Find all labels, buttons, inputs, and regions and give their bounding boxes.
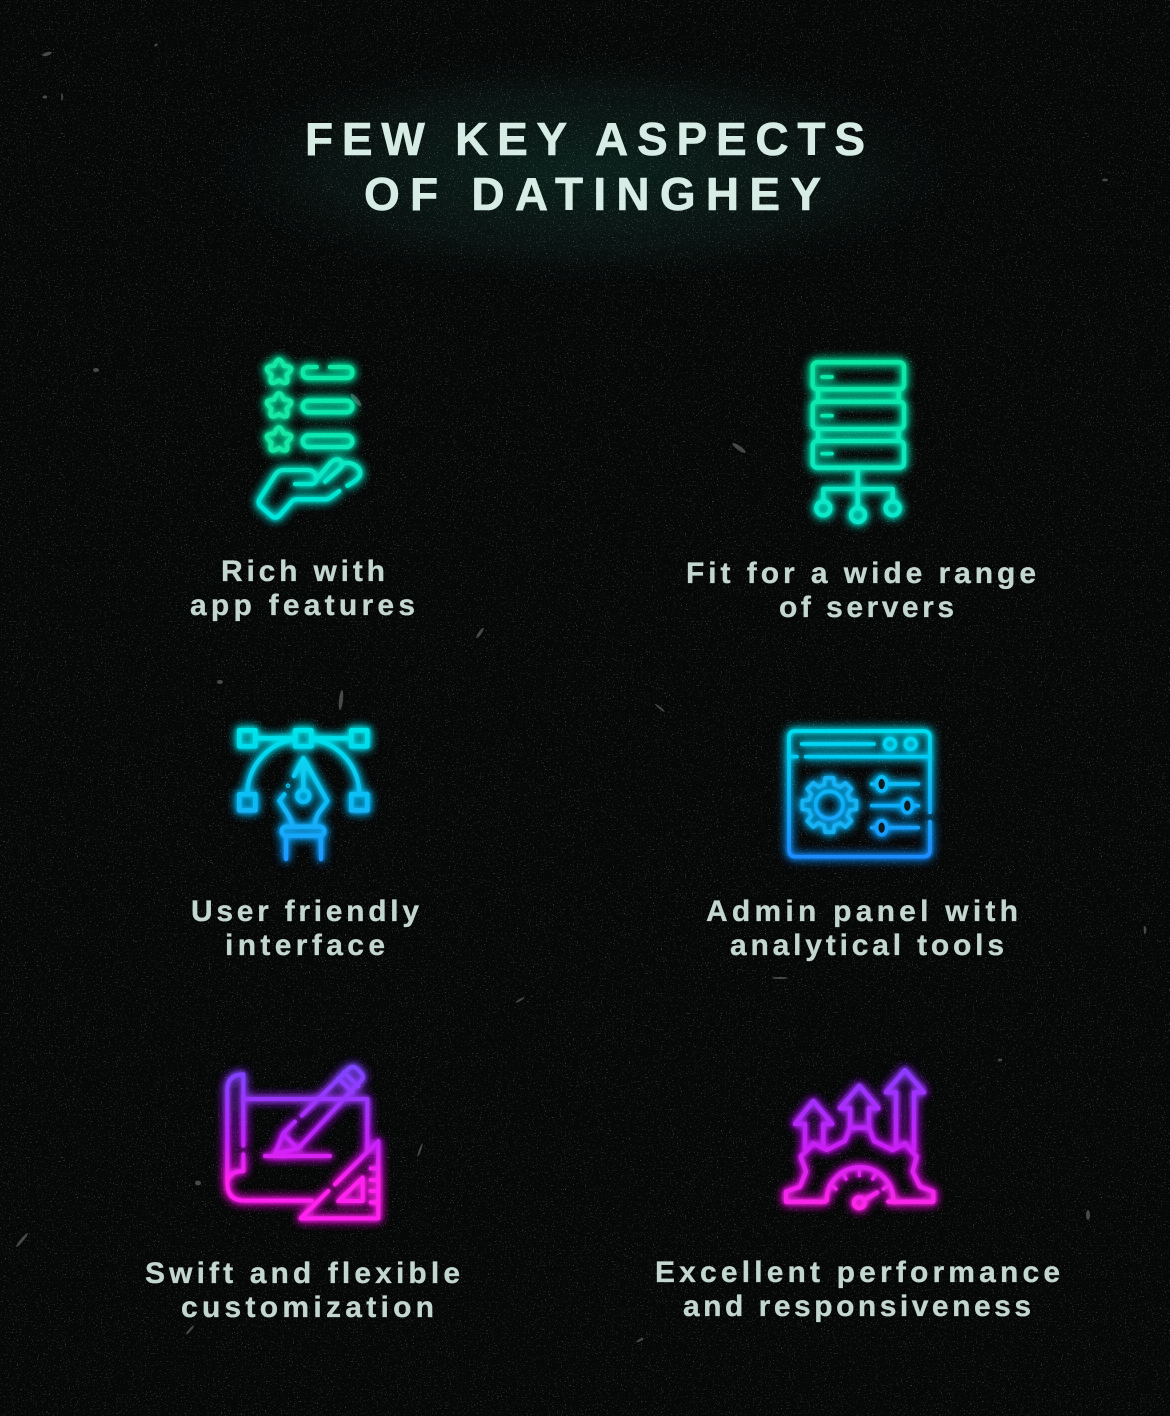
label: rich with app features: Rich with	[221, 555, 385, 588]
label: rich with app features: app features	[190, 589, 415, 622]
label: swift and flexible customization: Swift and flexible	[145, 1257, 460, 1290]
label: admin panel with analytical tools	[706, 895, 1018, 962]
title: OF DATINGHEY	[364, 168, 821, 220]
label: excellent performance and responsiveness	[655, 1256, 1060, 1323]
label: admin panel with analytical tools: analytical tools	[730, 929, 1004, 962]
title	[305, 113, 865, 220]
label: user friendly interface	[191, 895, 419, 962]
label: fit for a wide range of servers: of servers	[779, 591, 954, 624]
icon: admin settings window	[789, 731, 930, 857]
icon: blueprint with pencil and set square	[227, 1067, 378, 1218]
title: FEW KEY ASPECTS	[305, 113, 865, 165]
icon: vector pen tool	[239, 730, 367, 859]
label: fit for a wide range of servers: Fit for a wide range	[686, 557, 1036, 590]
icon: rated feature list on a hand	[259, 360, 360, 517]
label: user friendly interface: User friendly	[191, 895, 419, 928]
icon: server rack	[813, 362, 904, 522]
label: user friendly interface: interface	[225, 929, 385, 962]
label: fit for a wide range of servers	[686, 557, 1036, 624]
label: swift and flexible customization: customization	[181, 1291, 434, 1324]
label: excellent performance and responsiveness: and responsiveness	[683, 1290, 1031, 1323]
label: rich with app features	[190, 555, 415, 622]
icon: performance gauge with arrows	[786, 1070, 933, 1208]
label: admin panel with analytical tools: Admin panel with	[706, 895, 1018, 928]
label: excellent performance and responsiveness: Excellent performance	[655, 1256, 1060, 1289]
label: swift and flexible customization	[145, 1257, 460, 1324]
